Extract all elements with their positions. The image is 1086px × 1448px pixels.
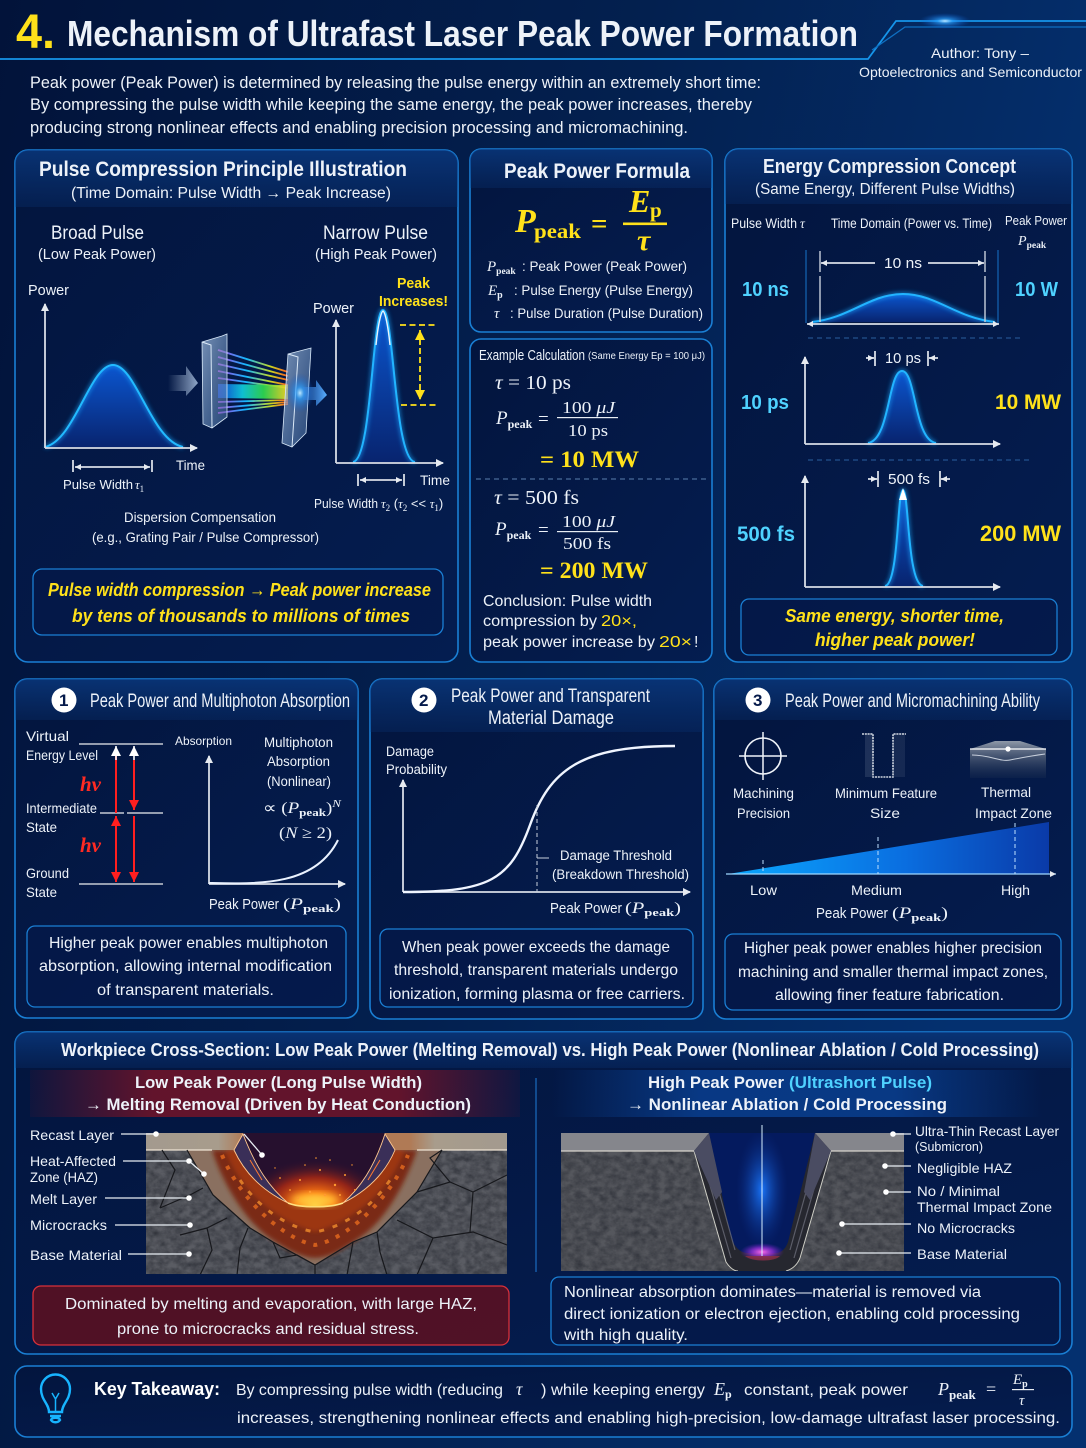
callout: same energy: higher peak power!: [815, 630, 975, 650]
caption: dispersion compensation: [92, 509, 319, 545]
column headers: Pulse Width: [731, 216, 797, 231]
panel: pulse compression principle: [15, 150, 458, 662]
chart: absorption vs peak power: Absorption: [267, 754, 330, 769]
cross-section: melting crater: [146, 1133, 507, 1275]
labels: melting crater: Base Material: [30, 1247, 122, 1263]
chart: damage probability curve: ): [674, 900, 681, 917]
chart: narrow pulse: 2: [386, 503, 390, 513]
legend: formula variables: : Pulse Duration (Pulse Duration): [510, 306, 703, 321]
chart: damage probability curve: Peak Power: [550, 901, 622, 917]
calculation: 500 fs: 100 μJ: [562, 512, 616, 531]
chart: absorption vs peak power: peak: [303, 903, 335, 915]
column headers: peak: [1027, 241, 1047, 251]
title: [16, 6, 858, 59]
legend: formula variables: P: [487, 259, 496, 275]
chart: damage probability curve: [386, 744, 690, 919]
legend: formula variables: τ: [494, 306, 500, 322]
chart: broad pulse: Pulse Width: [63, 477, 133, 492]
takeaway sentence: ) while keeping energy: [541, 1382, 705, 1399]
calculation: 500 fs: τ = 500 fs: [494, 487, 579, 509]
chart: rising wedge scale: Low: [750, 882, 778, 898]
takeaway sentence: By compressing pulse width (reducing: [236, 1382, 503, 1399]
number badge 2: 2: [419, 691, 428, 710]
subheading: high peak power: (Ultrashort Pulse): [789, 1073, 932, 1092]
chart: broad pulse: 1: [140, 484, 144, 494]
row: 10 ns pulse: 10 ns: [884, 255, 922, 272]
heading: Example Calculation: [479, 348, 585, 364]
legend: formula variables: : Pulse Energy (Pulse Energy): [514, 283, 693, 298]
energy level diagram: hν: [80, 833, 102, 857]
narrow pulse label: [315, 223, 437, 263]
subheading: low peak power: Low Peak Power (Long Pulse Width): [135, 1073, 422, 1092]
subheading: low peak power: [30, 1070, 520, 1117]
chart: absorption vs peak power: (N ≥ 2): [279, 825, 332, 842]
chart: absorption vs peak power: ): [326, 800, 332, 817]
formula: =: [986, 1379, 996, 1399]
takeaway sentence: p: [725, 1387, 732, 1401]
takeaway sentence: τ: [516, 1379, 523, 1399]
row: 500 fs pulse: 200 MW: [980, 521, 1061, 546]
panel: key takeaway: [15, 1366, 1072, 1437]
row: 10 ns pulse: 10 ns: [742, 279, 789, 301]
chart: absorption vs peak power: N: [331, 798, 342, 810]
text box: multiphoton explanation: absorption, allowing internal modification: [39, 958, 332, 975]
icon: crosshair, machining precision: Machining: [733, 785, 794, 801]
chart: narrow pulse: [313, 301, 450, 513]
diagram: pulse compressor with dispersed beam: [168, 334, 327, 447]
conclusion: 20×,: [601, 613, 637, 630]
callout: same energy: [741, 599, 1057, 655]
number badge 3: 3: [753, 691, 762, 710]
text box: cold processing summary: Nonlinear absorption dominates—material is removed via: [564, 1284, 981, 1301]
takeaway sentence: increases, strengthening nonlinear effects and enabling high-precision, low-damage ultrafast laser processing.: [237, 1410, 1060, 1427]
chart: rising wedge scale: High: [1001, 882, 1030, 898]
formula: [514, 183, 667, 257]
chart: broad pulse: Time: [176, 457, 205, 473]
chart: absorption vs peak power: (Nonlinear): [267, 774, 331, 789]
panel: transparent material damage: [370, 679, 703, 1019]
icon: crosshair, machining precision: [733, 732, 794, 821]
formula: =: [591, 208, 608, 240]
number badge 2: [412, 688, 436, 712]
legend: formula variables: p: [497, 290, 503, 301]
narrow pulse label: Narrow Pulse: [323, 223, 428, 244]
label: Key Takeaway:: [94, 1379, 220, 1399]
heading: [451, 686, 651, 729]
row: 500 fs pulse: 500 fs: [888, 471, 930, 488]
callout: compression result: Pulse width compression → Peak power increase: [48, 579, 431, 600]
narrow pulse label: (High Peak Power): [315, 246, 437, 263]
row: 500 fs pulse: 500 fs: [737, 523, 795, 546]
formula: P: [938, 1379, 949, 1399]
text box: melting summary: prone to microcracks and residual stress.: [117, 1321, 419, 1338]
header decoration: [0, 13, 1086, 59]
subheading: high peak power: [552, 1070, 1042, 1117]
calculation: 500 fs: P: [495, 519, 507, 540]
heading: Peak Power and Multiphoton Absorption: [90, 691, 350, 712]
takeaway sentence: constant, peak power: [744, 1382, 909, 1399]
labels: melting crater: Microcracks: [30, 1217, 107, 1233]
author credit: [859, 45, 1082, 80]
calculation: 10 ps: peak: [508, 417, 533, 431]
column headers: τ: [800, 216, 806, 231]
calculation: 10 ps: 10 ps: [568, 421, 608, 440]
icon: trench, minimum feature size: Minimum Feature: [835, 785, 937, 801]
energy level diagram: hν: [80, 772, 102, 796]
chart: broad pulse: Power: [28, 283, 69, 299]
row: 10 ns pulse: [742, 250, 1058, 324]
labels: ablated trench: Thermal Impact Zone: [917, 1199, 1052, 1215]
chart: rising wedge scale: ): [941, 905, 948, 922]
text box: micromachining explanation: machining and smaller thermal impact zones,: [738, 964, 1048, 981]
chart: rising wedge scale: [726, 822, 1056, 924]
column headers: Time Domain (Power vs. Time): [831, 216, 992, 231]
formula: peak: [534, 219, 581, 243]
energy level diagram: State: [26, 884, 57, 900]
callout: compression result: by tens of thousands to millions of times: [72, 605, 410, 626]
conclusion: compression by: [483, 613, 597, 630]
labels: ablated trench: No / Minimal: [917, 1183, 1000, 1199]
calculation: 500 fs: [494, 487, 648, 583]
row: 10 ns pulse: 10 W: [1015, 279, 1058, 301]
broad pulse label: Broad Pulse: [51, 223, 144, 244]
text box: multiphoton explanation: [27, 926, 346, 1007]
number badge 3: [746, 688, 770, 712]
conclusion: Conclusion: Pulse width: [483, 593, 652, 610]
panel: micromachining ability: [714, 679, 1072, 1019]
chart: rising wedge scale: (P: [892, 905, 908, 922]
labels: ablated trench: Base Material: [917, 1246, 1007, 1262]
heading: Peak Power and Transparent: [451, 686, 651, 707]
icon: light bulb: [41, 1374, 70, 1422]
chart: damage probability curve: peak: [644, 907, 675, 919]
legend: formula variables: peak: [496, 267, 516, 277]
callout: compression result: [33, 569, 443, 635]
icon: thermal impact block: Thermal: [981, 784, 1031, 800]
subheading: high peak power: → Nonlinear Ablation / Cold Processing: [627, 1095, 947, 1114]
number badge 1: [52, 688, 76, 712]
labels: ablated trench: (Submicron): [915, 1140, 983, 1154]
energy level diagram: Energy Level: [26, 747, 98, 763]
labels: melting crater: Heat-Affected: [30, 1153, 116, 1169]
column headers: [731, 213, 1068, 251]
icon: trench, minimum feature size: Size: [870, 805, 900, 821]
chart: rising wedge scale: peak: [911, 912, 942, 924]
chart: absorption vs peak power: Multiphoton: [264, 735, 333, 750]
heading: [755, 156, 1016, 198]
heading: (Same Energy, Different Pulse Widths): [755, 181, 1015, 198]
chart: narrow pulse: Pulse Width: [314, 496, 378, 511]
annotation: peak increases: Increases!: [379, 293, 448, 310]
calculation: 10 ps: τ = 10 ps: [495, 372, 571, 394]
chart: narrow pulse: (: [390, 496, 399, 511]
labels: melting crater: Melt Layer: [30, 1191, 97, 1207]
calculation: 500 fs: =: [538, 520, 549, 541]
labels: ablated trench: No Microcracks: [917, 1220, 1015, 1236]
heading: [479, 348, 705, 364]
title: 4.: [16, 6, 55, 59]
subheading: low peak power: → Melting Removal (Driven by Heat Conduction): [85, 1095, 471, 1114]
icon: trench, minimum feature size: [835, 733, 937, 821]
calculation: 10 ps: = 10 MW: [540, 447, 639, 472]
legend: formula variables: : Peak Power (Peak Power): [522, 259, 687, 274]
labels: melting crater: Recast Layer: [30, 1127, 114, 1143]
legend: formula variables: [486, 259, 703, 322]
calculation: 10 ps: =: [538, 409, 549, 430]
icon: thermal impact block: Impact Zone: [975, 805, 1052, 821]
caption: dispersion compensation: (e.g., Grating Pair / Pulse Compressor): [92, 529, 319, 545]
broad pulse label: [38, 223, 156, 263]
chart: absorption vs peak power: Peak Power: [209, 897, 279, 913]
row: 10 ps pulse: 10 ps: [885, 350, 921, 367]
introduction text: producing strong nonlinear effects and enabling precision processing and micromachining.: [30, 119, 688, 137]
text box: micromachining explanation: [725, 934, 1061, 1010]
labels: melting crater: Zone (HAZ): [30, 1169, 98, 1185]
panel: multiphoton absorption: [15, 679, 358, 1018]
energy level diagram: Ground: [26, 865, 69, 881]
calculation: 10 ps: P: [496, 408, 508, 429]
formula: E: [628, 183, 650, 219]
chart: narrow pulse: τ: [398, 496, 403, 511]
calculation: 500 fs: 500 fs: [563, 534, 611, 553]
heading: Material Damage: [488, 708, 614, 729]
text box: melting summary: [33, 1286, 509, 1345]
chart: damage probability curve: Damage Threshold: [560, 848, 672, 863]
caption: dispersion compensation: Dispersion Compensation: [124, 509, 276, 525]
calculation: 10 ps: 100 μJ: [562, 398, 616, 417]
text box: damage explanation: threshold, transparent materials undergo: [394, 962, 678, 979]
row: 500 fs pulse: [737, 471, 1061, 587]
icon: crosshair, machining precision: Precision: [737, 805, 790, 821]
title: Mechanism of Ultrafast Laser Peak Power Formation: [67, 13, 858, 54]
text box: damage explanation: When peak power exceeds the damage: [402, 939, 670, 956]
labels: ablated trench: [836, 1123, 1059, 1262]
laser beam: [760, 1120, 764, 1258]
conclusion: 20×: [659, 634, 692, 651]
panel: workpiece cross-section comparison: [15, 1032, 1072, 1354]
heading: (Same Energy Ep = 100 μJ): [588, 351, 705, 362]
text box: multiphoton explanation: Higher peak power enables multiphoton: [49, 935, 328, 952]
column headers: P: [1018, 234, 1027, 249]
formula: τ: [637, 224, 652, 257]
calculation: 500 fs: = 200 MW: [540, 558, 648, 583]
energy level diagram: Virtual: [26, 728, 69, 744]
heading: Energy Compression Concept: [763, 156, 1016, 178]
legend: formula variables: E: [488, 283, 497, 299]
chart: broad pulse: [28, 283, 205, 494]
panel: energy compression concept: [725, 149, 1072, 662]
text box: melting summary: Dominated by melting and evaporation, with large HAZ,: [65, 1296, 477, 1313]
text box: damage explanation: [380, 929, 693, 1007]
row: 10 ps pulse: 10 MW: [995, 391, 1061, 414]
row: 10 ps pulse: 10 ps: [741, 392, 789, 414]
formula: τ: [1019, 1393, 1025, 1409]
chart: narrow pulse: <<: [407, 496, 430, 511]
chart: absorption vs peak power: ): [334, 896, 341, 913]
text box: multiphoton explanation: of transparent materials.: [97, 982, 274, 999]
energy level diagram: Intermediate: [26, 800, 97, 816]
labels: melting crater: [30, 1127, 265, 1263]
takeaway sentence: E: [714, 1379, 725, 1399]
introduction text: [30, 74, 761, 137]
chart: broad pulse: τ: [135, 477, 140, 492]
energy level diagram: [26, 728, 163, 900]
subheading: high peak power: High Peak Power: [648, 1073, 784, 1092]
formula: p: [650, 198, 662, 222]
chart: narrow pulse: 1: [434, 503, 439, 513]
panel: peak power formula: [470, 149, 712, 332]
conclusion: !: [694, 634, 698, 651]
text box: micromachining explanation: allowing finer feature fabrication.: [775, 987, 1004, 1004]
formula: [937, 1372, 1034, 1409]
chart: absorption vs peak power: (P: [283, 896, 300, 913]
formula: P: [514, 203, 536, 240]
chart: damage probability curve: Probability: [386, 762, 447, 777]
introduction text: Peak power (Peak Power) is determined by releasing the pulse energy within an extremely short time:: [30, 74, 761, 92]
chart: rising wedge scale: Medium: [851, 882, 902, 898]
chart: absorption vs peak power: Absorption: [175, 734, 232, 748]
author credit: Author: Tony –: [931, 45, 1029, 61]
labels: ablated trench: Negligible HAZ: [917, 1160, 1012, 1176]
conclusion: [483, 593, 698, 651]
introduction text: By compressing the pulse width while keeping the same energy, the peak power increases, thereby: [30, 96, 753, 114]
icon: thermal impact block: [970, 741, 1052, 821]
formula: E: [1013, 1372, 1022, 1388]
energy level diagram: State: [26, 819, 57, 835]
subheading: (Time Domain: Pulse Width → Peak Increase): [71, 185, 391, 202]
chart: rising wedge scale: Peak Power: [816, 906, 888, 922]
labels: ablated trench: Ultra-Thin Recast Layer: [915, 1123, 1059, 1139]
chart: damage probability curve: (Breakdown Threshold): [552, 867, 689, 882]
text box: cold processing summary: [551, 1277, 1060, 1345]
column headers: Peak Power: [1005, 213, 1068, 228]
chart: damage probability curve: (P: [625, 900, 641, 917]
panel: example calculation: [470, 339, 712, 662]
chart: narrow pulse: 2: [403, 503, 407, 513]
heading: Peak Power Formula: [504, 160, 690, 183]
chart: absorption vs peak power: peak: [299, 807, 327, 819]
annotation: peak increases: Peak: [397, 275, 431, 292]
chart: absorption vs peak power: [175, 734, 345, 915]
formula: p: [1022, 1379, 1028, 1390]
author credit: Optoelectronics and Semiconductor: [859, 64, 1082, 80]
takeaway sentence: [236, 1379, 1060, 1427]
chart: narrow pulse: τ: [430, 496, 434, 511]
chart: damage probability curve: Damage: [386, 744, 434, 759]
chart: narrow pulse: Power: [313, 301, 354, 317]
conclusion: peak power increase by: [483, 634, 655, 651]
calculation: 500 fs: peak: [507, 528, 532, 542]
row: 10 ps pulse: [741, 350, 1061, 444]
chart: narrow pulse: τ: [381, 496, 386, 511]
callout: same energy: Same energy, shorter time,: [785, 606, 1004, 626]
number badge 1: 1: [59, 691, 68, 710]
cross-section: ablated trench with laser beam: [561, 1130, 904, 1271]
text box: cold processing summary: with high quality.: [563, 1327, 688, 1344]
formula: peak: [949, 1387, 976, 1402]
calculation: 10 ps: [495, 372, 639, 472]
text box: micromachining explanation: Higher peak power enables higher precision: [744, 940, 1042, 957]
heading: Pulse Compression Principle Illustration: [39, 158, 407, 181]
annotation: peak increases: [379, 275, 448, 405]
chart: narrow pulse: Time: [420, 472, 450, 488]
chart: narrow pulse: ): [439, 496, 443, 511]
chart: absorption vs peak power: ∝ (P: [263, 800, 297, 817]
text box: cold processing summary: direct ionization or electron ejection, enabling cold processing: [564, 1306, 1020, 1323]
text box: damage explanation: ionization, forming plasma or free carriers.: [389, 986, 685, 1003]
broad pulse label: (Low Peak Power): [38, 246, 156, 263]
